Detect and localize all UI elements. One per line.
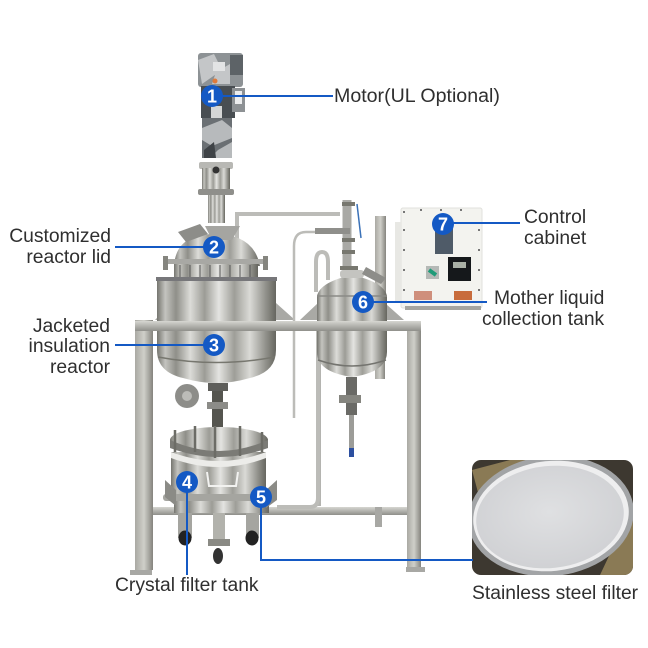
crystal filter tank: [163, 426, 277, 564]
label: jacketed insulation reactor: insulation: [29, 336, 110, 357]
leader line: stainless steel filter: [261, 506, 473, 560]
label: customized reactor lid: reactor lid: [26, 247, 111, 268]
leader line: crystal filter tank: [186, 490, 188, 575]
support frame rear parts: [153, 216, 407, 527]
jacketed reactor vessel: [156, 277, 277, 427]
stirrer bearing frame: [198, 162, 234, 223]
badge 2: [203, 236, 225, 258]
leader line: control cabinet: [452, 222, 520, 224]
badge 7: [432, 213, 454, 235]
label: control cabinet: cabinet: [524, 228, 587, 249]
stainless steel filter photo: [472, 460, 633, 575]
label: mother liquid collection tank: Mother liquid: [494, 288, 604, 309]
leader line: mother liquid tank: [372, 301, 487, 303]
mother liquid collection tank: [317, 267, 387, 457]
label: stainless steel filter: Stainless steel filter: [472, 583, 639, 604]
badge 4: 4: [182, 472, 192, 492]
label: jacketed insulation reactor: Jacketed: [33, 316, 110, 337]
front support frame: [130, 320, 425, 575]
leader line: motor: [222, 95, 333, 97]
badge 6: [352, 291, 374, 313]
label: jacketed insulation reactor: reactor: [50, 357, 111, 378]
badge 4: [176, 471, 198, 493]
label: mother liquid collection tank: collection tank: [482, 309, 605, 330]
label: motor: Motor(UL Optional): [334, 85, 500, 107]
label: customized reactor lid: Customized: [9, 226, 111, 247]
piping to mother liquid tank: [237, 200, 361, 507]
badge 6: 6: [358, 292, 368, 312]
reactor lid: [163, 224, 268, 277]
label: control cabinet: Control: [524, 207, 586, 228]
badge 7: 7: [438, 214, 448, 234]
badge 2: 2: [209, 238, 219, 258]
badge 1: 1: [207, 86, 217, 106]
label: crystal filter tank: Crystal filter tank: [115, 575, 259, 596]
badge 5: [250, 486, 272, 508]
badge 1: [201, 85, 223, 107]
badge 3: [203, 334, 225, 356]
badge 5: 5: [256, 488, 266, 508]
leader line: jacketed reactor: [115, 344, 205, 346]
motor: [198, 53, 245, 158]
control cabinet: [395, 208, 482, 310]
badge 3: 3: [209, 336, 219, 356]
leader line: reactor lid: [115, 246, 205, 248]
